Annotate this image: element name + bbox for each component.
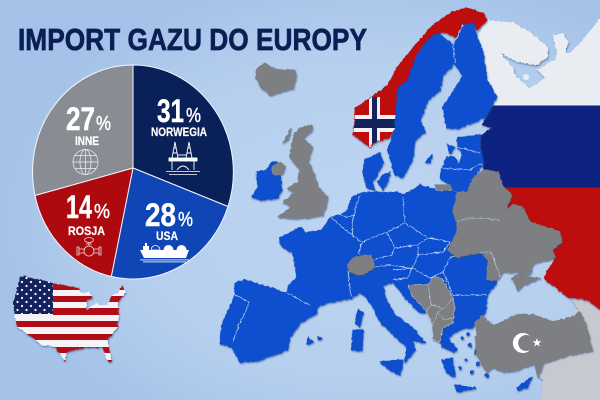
western Balkans	[408, 277, 455, 342]
pie chart	[33, 65, 233, 279]
label: Inne: %	[96, 113, 111, 135]
Iceland	[256, 63, 296, 95]
label: Inne	[66, 101, 111, 148]
icon: LNG tanker	[140, 243, 189, 262]
Baltic states	[440, 135, 483, 192]
label: Rosja: %	[94, 201, 110, 223]
Switzerland	[347, 255, 375, 275]
Crimea	[512, 273, 540, 290]
icon: Turkish crescent	[513, 333, 530, 353]
Russia with flag stripes	[478, 18, 600, 312]
label: Norwegia: NORWEGIA	[151, 125, 207, 139]
USA flag map	[12, 276, 128, 364]
White Sea island	[523, 74, 529, 80]
slice: Rosja	[35, 168, 133, 276]
Norway	[353, 8, 487, 147]
slice: Norwegia	[133, 65, 233, 206]
Great Britain and Northern Ireland	[272, 125, 328, 218]
label: USA: %	[178, 209, 193, 231]
icon: Turkish star	[532, 338, 542, 346]
Sweden, Finland, Denmark	[363, 23, 497, 190]
map of Europe	[220, 0, 600, 400]
icon: valve	[77, 238, 101, 256]
land: Middle East light gray	[538, 298, 600, 400]
mainland EU	[220, 185, 497, 362]
label: Rosja: 14	[66, 189, 92, 225]
Turkey	[475, 312, 592, 377]
slice: USA	[111, 168, 228, 279]
icon: globe	[73, 150, 98, 174]
title: IMPORT GAZU DO EUROPY	[18, 22, 367, 57]
label: Norwegia: %	[186, 105, 201, 127]
Belarus	[453, 170, 512, 222]
Norwegian flag cross	[354, 96, 396, 148]
country borders	[233, 25, 487, 343]
icon: oil rig	[166, 142, 200, 174]
label: USA: USA	[156, 229, 178, 243]
label: Inne: 27	[66, 101, 95, 137]
label: USA: 28	[145, 197, 176, 233]
label: Rosja	[66, 189, 110, 238]
Mediterranean islands and Greece	[307, 310, 532, 392]
slice: Inne	[33, 65, 133, 196]
label: Inne: INNE	[75, 134, 99, 148]
Kaliningrad	[435, 185, 452, 190]
label: Norwegia	[151, 93, 207, 139]
Belarus-Ukraine-Moldova borders	[457, 218, 500, 277]
label: USA	[145, 197, 193, 243]
Ukraine and Moldova	[448, 205, 562, 280]
Ireland	[252, 162, 282, 200]
label: Rosja: ROSJA	[68, 224, 105, 238]
label: Norwegia: 31	[157, 93, 184, 129]
